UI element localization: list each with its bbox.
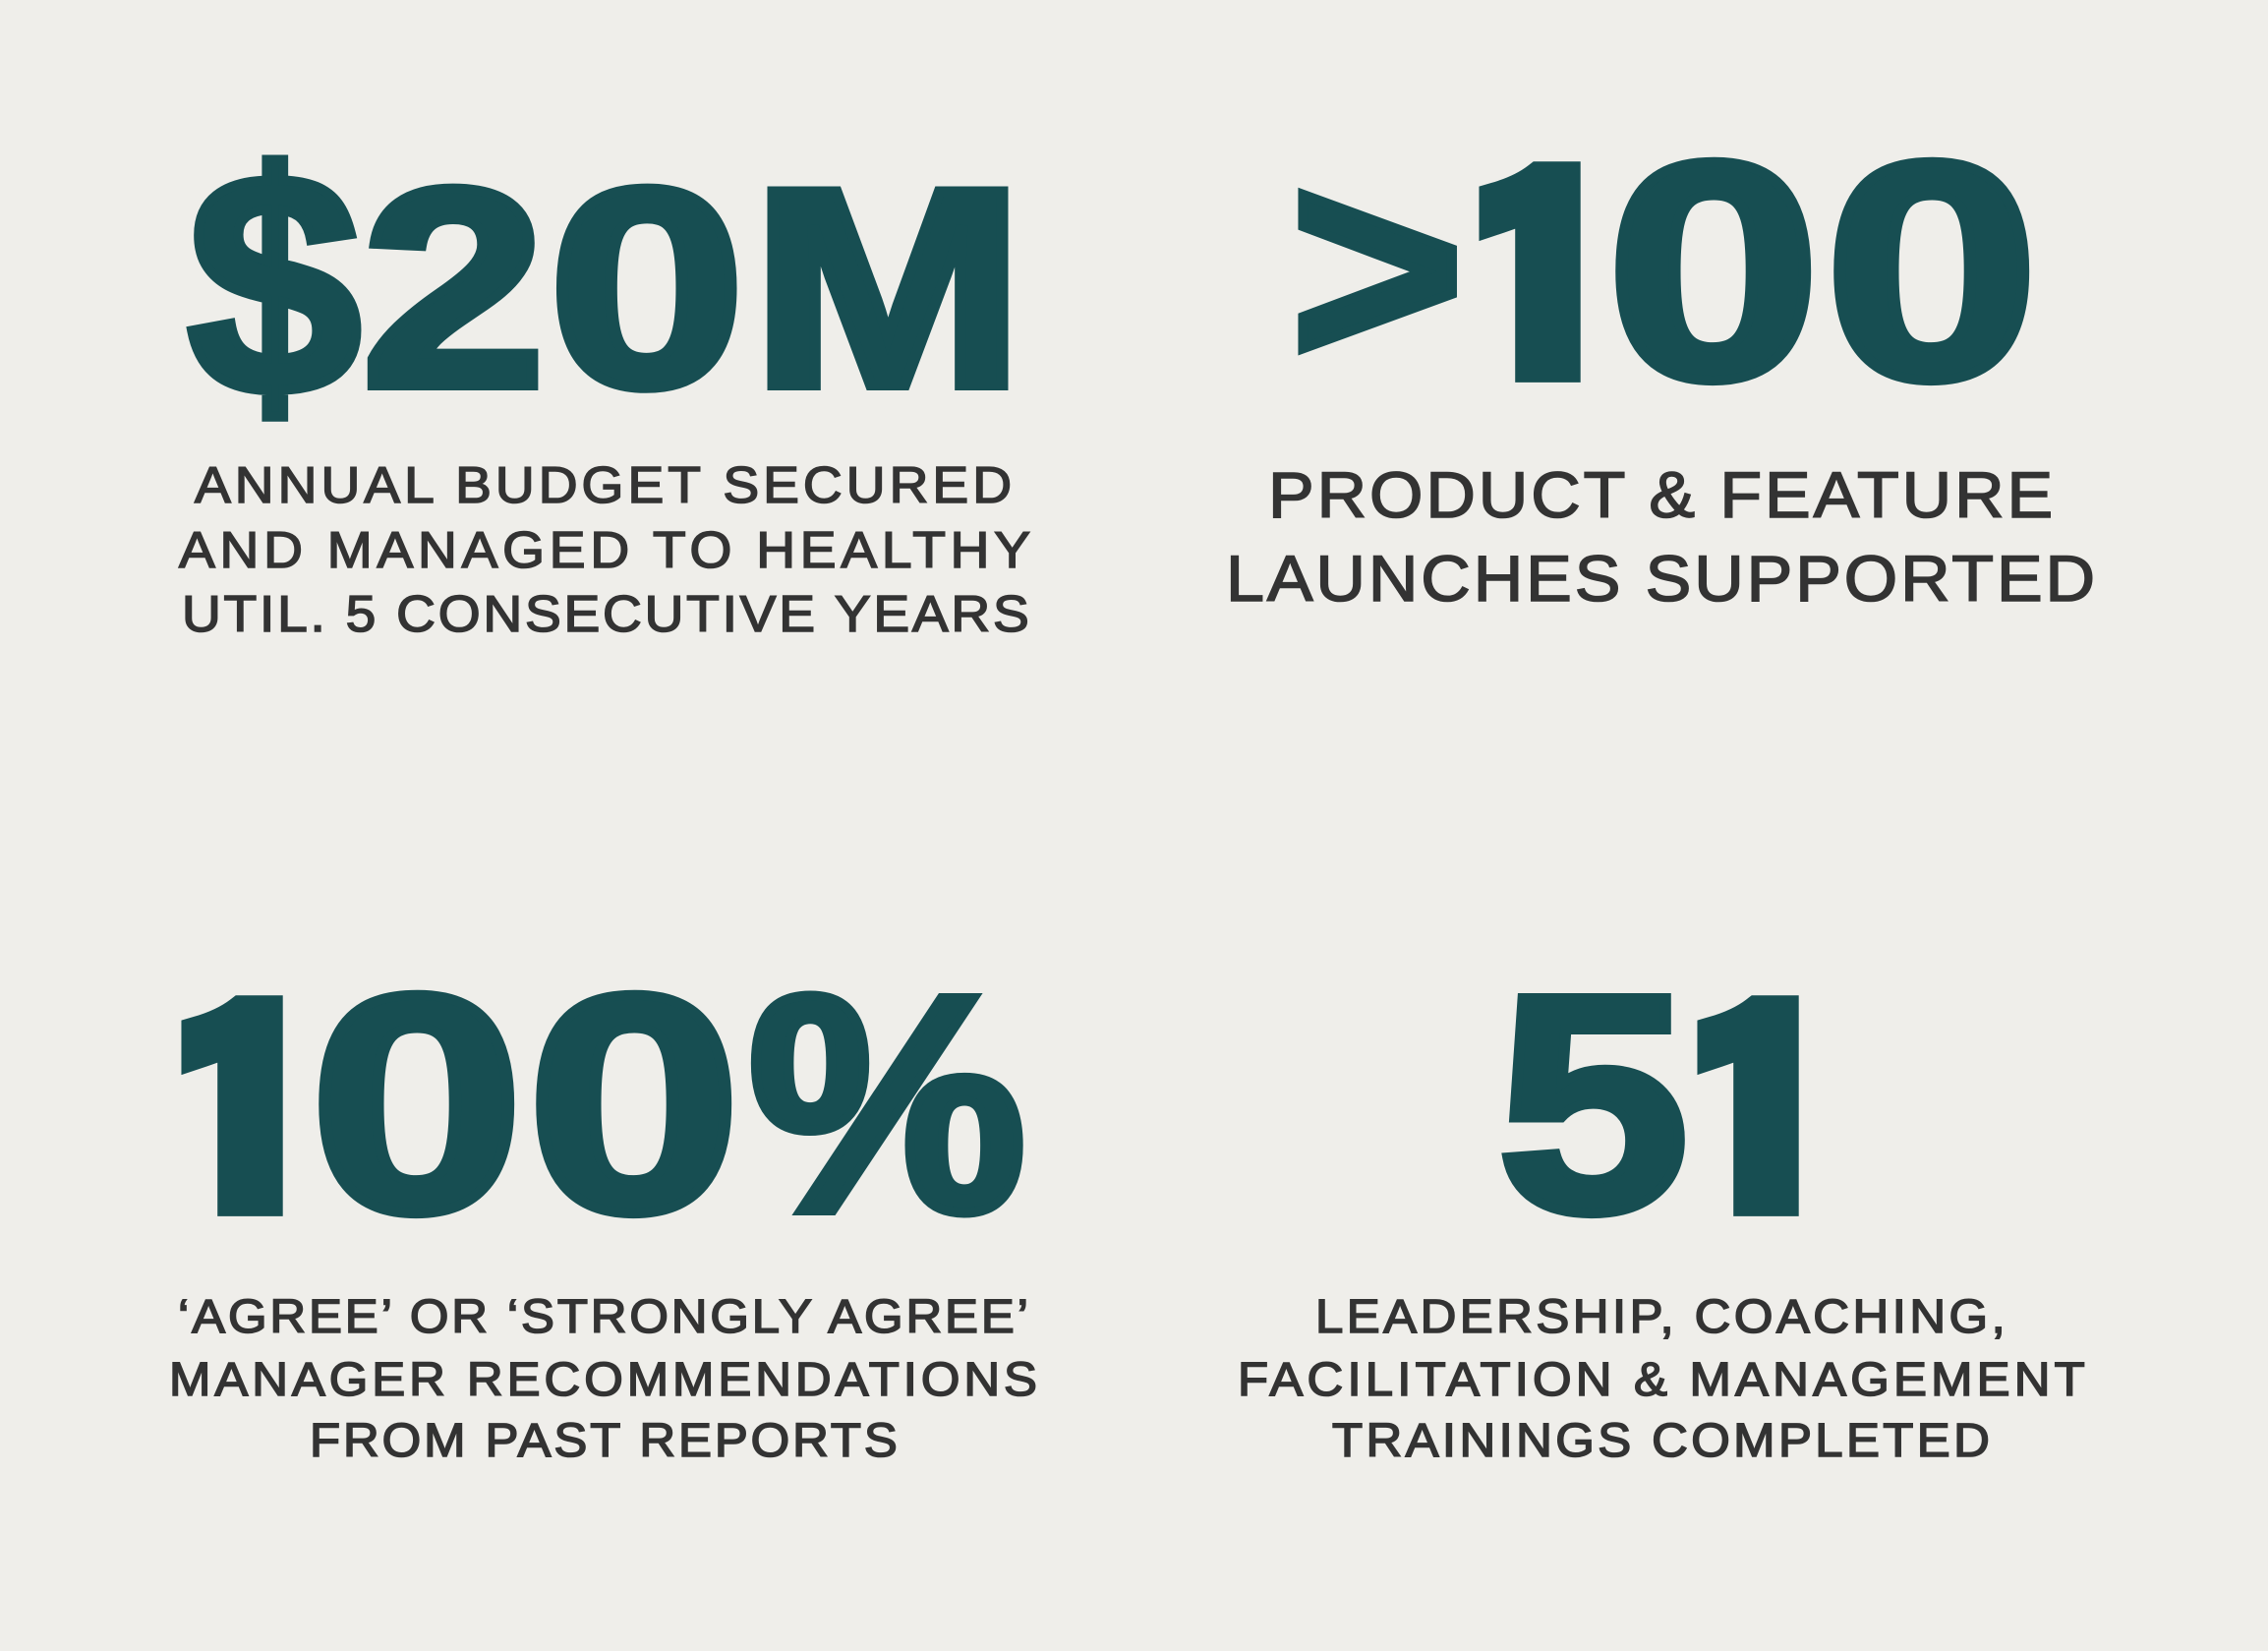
caption: annual budget: AND MANAGED TO HEALTHY [179, 521, 1030, 579]
caption: annual budget: UTIL. 5 CONSECUTIVE YEARS [182, 585, 1029, 643]
big number: $20M: 0 [549, 130, 745, 445]
big number: 100% [159, 931, 1026, 1276]
big number: >100 [1291, 98, 2039, 443]
big number: $20M: M [751, 130, 1024, 445]
caption: recommendations: FROM PAST REPORTS [310, 1414, 898, 1467]
caption: trainings: TRAININGS COMPLETED [1332, 1414, 1990, 1467]
caption: annual budget: ANNUAL BUDGET SECURED [195, 456, 1012, 514]
caption: trainings: FACILITATION & MANAGEMENT [1238, 1353, 2085, 1406]
big number: >100: > [1291, 108, 1464, 427]
caption: annual budget [179, 456, 1030, 643]
caption: trainings [1238, 1290, 2085, 1467]
big number: 100%: 1 [159, 975, 331, 1249]
big number: 100%: % [748, 931, 1026, 1276]
big number: $20M [188, 108, 1024, 460]
caption: trainings: LEADERSHIP, COACHING, [1315, 1290, 2006, 1343]
caption: launches [1226, 459, 2095, 616]
big number: >100: 0 [1606, 98, 1821, 443]
caption: recommendations: ‘AGREE’ OR ‘STRONGLY AGREE’ [178, 1290, 1028, 1343]
caption: launches: PRODUCT & FEATURE [1268, 459, 2053, 532]
big number: $20M: $ [188, 108, 361, 460]
caption: launches: LAUNCHES SUPPORTED [1226, 543, 2095, 616]
panel: annual budget [179, 108, 1030, 643]
panel: recommendations [159, 931, 1037, 1467]
big number: $20M: 2 [362, 130, 546, 445]
caption: recommendations: MANAGER RECOMMENDATIONS [169, 1353, 1037, 1406]
panel: launches [1226, 98, 2095, 616]
big number: 51: 1 [1675, 975, 1847, 1249]
big number: 51 [1497, 931, 1847, 1276]
big number: >100: 0 [1825, 98, 2039, 443]
caption: recommendations [169, 1290, 1037, 1467]
panel: trainings [1238, 931, 2085, 1467]
big number: 100%: 0 [527, 931, 741, 1276]
big number: 51: 5 [1497, 931, 1689, 1276]
big number: >100: 1 [1457, 142, 1629, 415]
big number: 100%: 0 [310, 931, 524, 1276]
